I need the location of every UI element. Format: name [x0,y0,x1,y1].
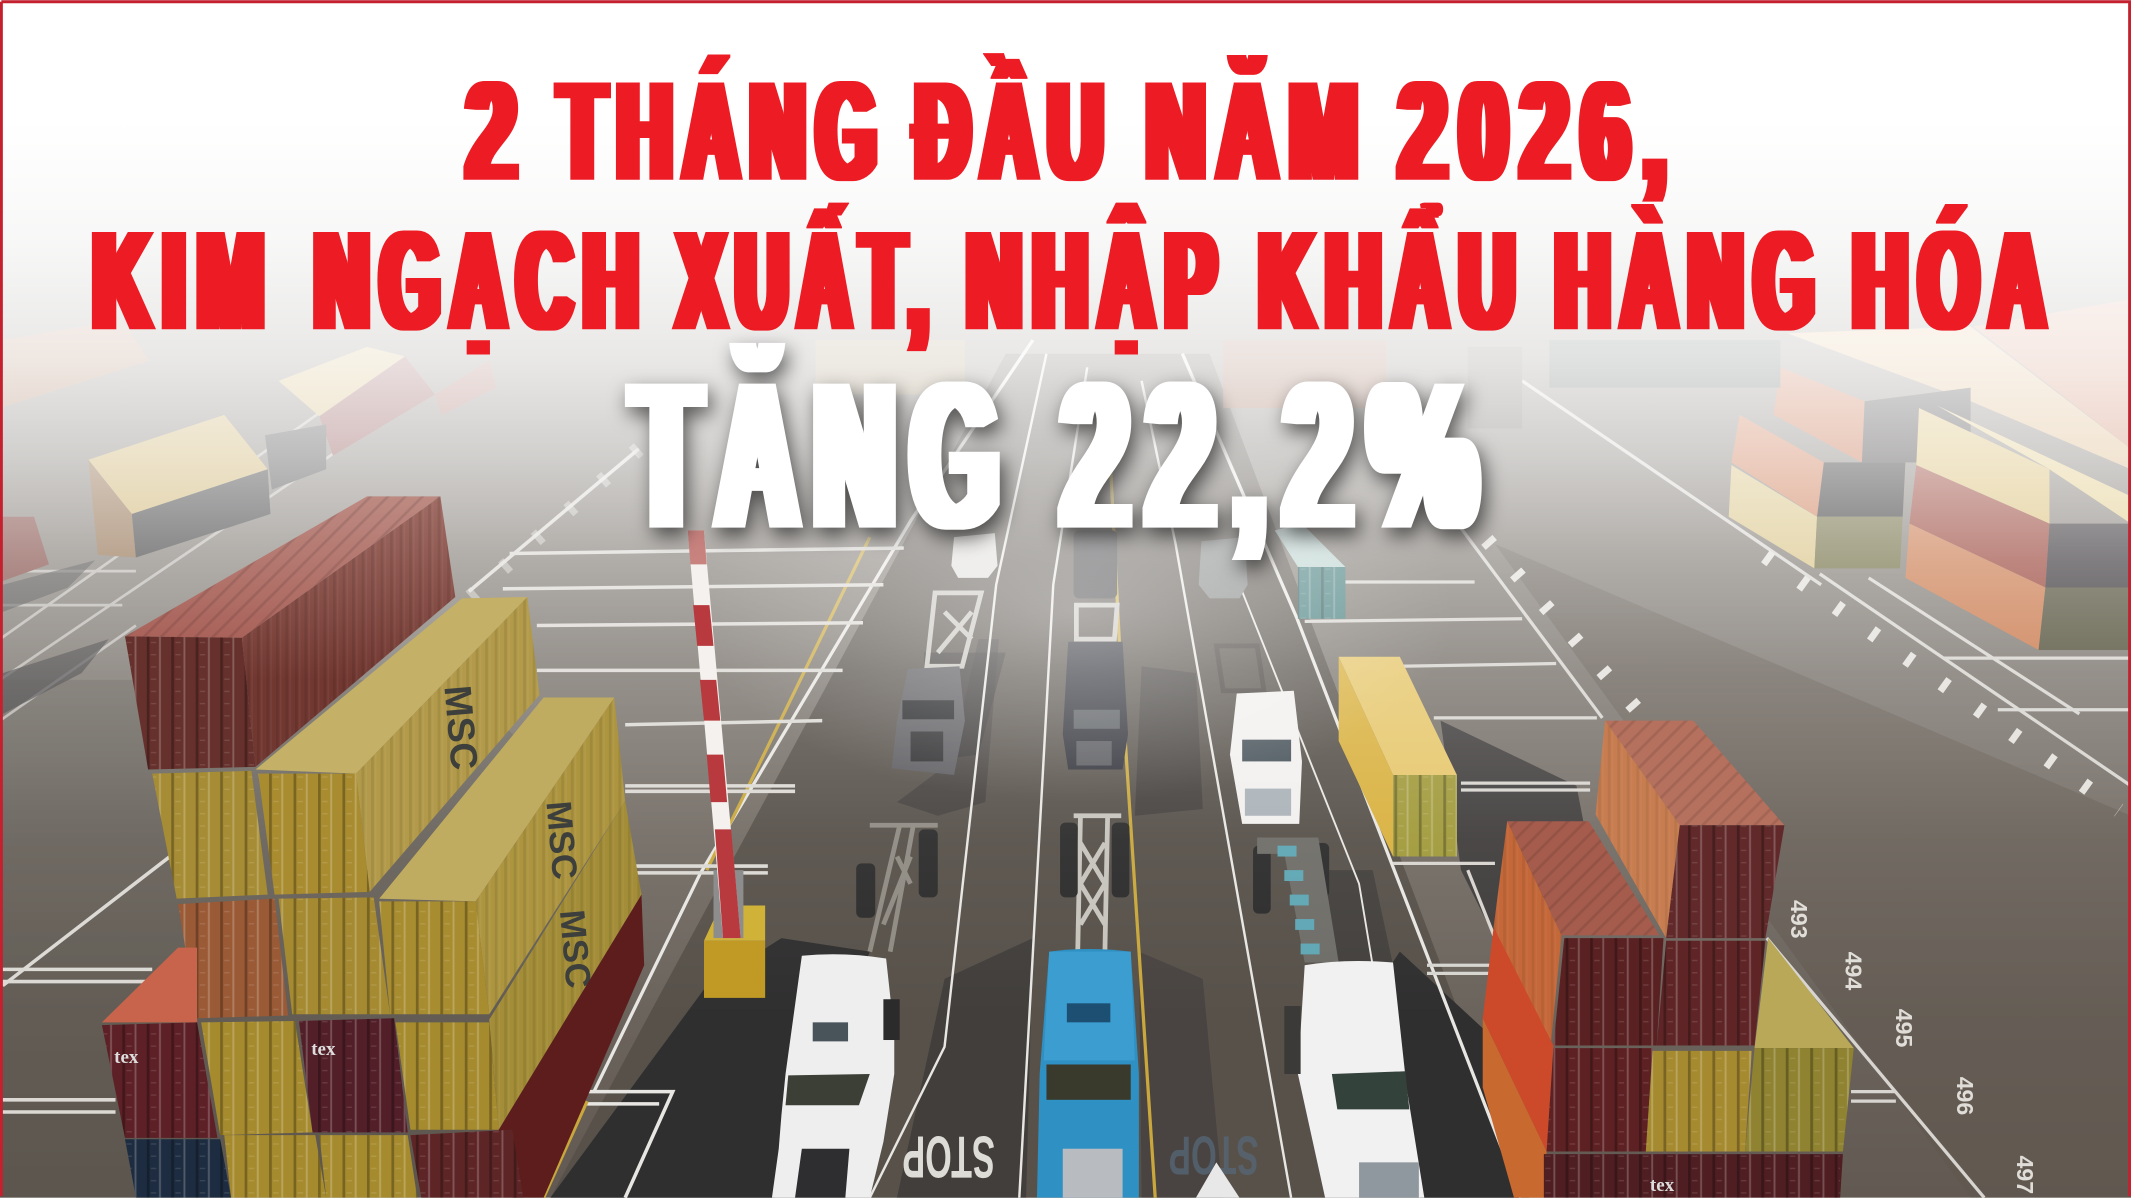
second orange container [1507,821,1659,935]
msc logo on upper yellow: MSC [435,684,485,772]
trucks and chassis in the middle lanes [856,530,1339,963]
red orange side [1483,927,1553,1151]
headline line 1: ĐẦU [915,52,1115,210]
headline line 1: 2026, [1399,52,1680,210]
parking bay numbers [1786,900,2038,1194]
headline line 2: NGẠCH [315,201,650,359]
left road edge [594,340,1033,1092]
headline line 2: NHẬP [967,201,1227,359]
red and white pole with base [688,530,765,998]
chassis frames [870,593,1264,952]
upper yellow container [256,597,527,774]
road paint: STOP: STOP [902,1124,995,1191]
middle yellow [279,897,390,1014]
yellow road lines [544,408,1155,1198]
tex red container [102,1022,217,1138]
headline line 2: XUẤT, [677,201,939,359]
headline line 1: NĂM [1146,52,1370,210]
left foreground container stack: MSC [552,908,598,990]
right foreground container stack [1483,721,1854,1198]
far right yard tone [1495,544,2131,1198]
road paint: faded STOP and arrow: STOP [1169,1125,1258,1186]
headline line 2 [93,201,2057,359]
left foreground container stack: MSC [538,799,584,881]
left foreground container stack [102,496,644,1198]
mid dark truck left [892,666,965,775]
bottom navy container [125,1139,231,1198]
tex red container two [299,1018,408,1132]
road dark shadows [550,639,1590,1198]
right road edge [1182,354,1521,1198]
white truck right [1284,961,1424,1198]
parking bay numbers: 497 [2012,1156,2038,1194]
left yard tone [0,680,639,1198]
orange roof container [102,948,197,1022]
headline line 1 [467,52,1680,210]
fourth yellow container [489,801,641,1130]
yellow container row [201,1021,313,1135]
left foreground container stack: tex [311,1039,336,1060]
far right container stacks (fog faded) [1729,299,2131,650]
right foreground container stack: tex [1650,1175,1675,1196]
teal container [1275,524,1345,619]
bottom yellow containers [224,1135,326,1198]
headline line 2: KHẨU [1259,201,1526,359]
left column yellow [152,771,268,899]
blue truck center [1037,949,1139,1198]
dashed bay tick marks [469,449,2119,810]
center distant equipment [815,340,1780,428]
white truck left [772,954,900,1198]
headline line 1: 2 [467,52,530,210]
headline line 2: KIM [93,201,276,359]
far left container stacks (fog faded) [0,320,496,582]
row faces [1547,1048,1653,1151]
left foreground container stack: tex [114,1047,139,1068]
upper orange container [1605,721,1784,825]
far trucks [951,533,998,578]
parking bay numbers: 493 [1786,900,1812,939]
parking markings left of road [3,449,904,1112]
dark red bottom container [499,895,644,1198]
yellow container near road [1339,657,1457,857]
parking bay numbers: 496 [1952,1077,1978,1115]
headline line 1: THÁNG [559,52,888,210]
third yellow container [379,698,614,901]
bottom row faces [1544,1154,1843,1198]
orange CPN container [178,899,288,1018]
headline line 2: HÀNG [1555,201,1825,359]
headline highlight: growth figure: TĂNG [633,340,1015,573]
parking bay numbers: 494 [1841,952,1867,990]
headline highlight: growth figure: 22,2% [1062,340,1495,573]
parking bay numbers: 495 [1891,1009,1917,1047]
top brown container [125,496,440,638]
olive top container [1755,938,1854,1048]
mid white truck [1230,691,1302,824]
parking markings right of road [1305,381,2131,1198]
central fog glow [693,422,1454,802]
road paint: faded STOP and arrow [1169,1125,1258,1198]
teal chassis [1257,838,1339,963]
mid dark truck center [1063,642,1128,770]
road lane lines [587,340,1521,1198]
far-left yard markings [0,408,381,721]
headline [93,52,2057,573]
central road [550,354,1529,1198]
